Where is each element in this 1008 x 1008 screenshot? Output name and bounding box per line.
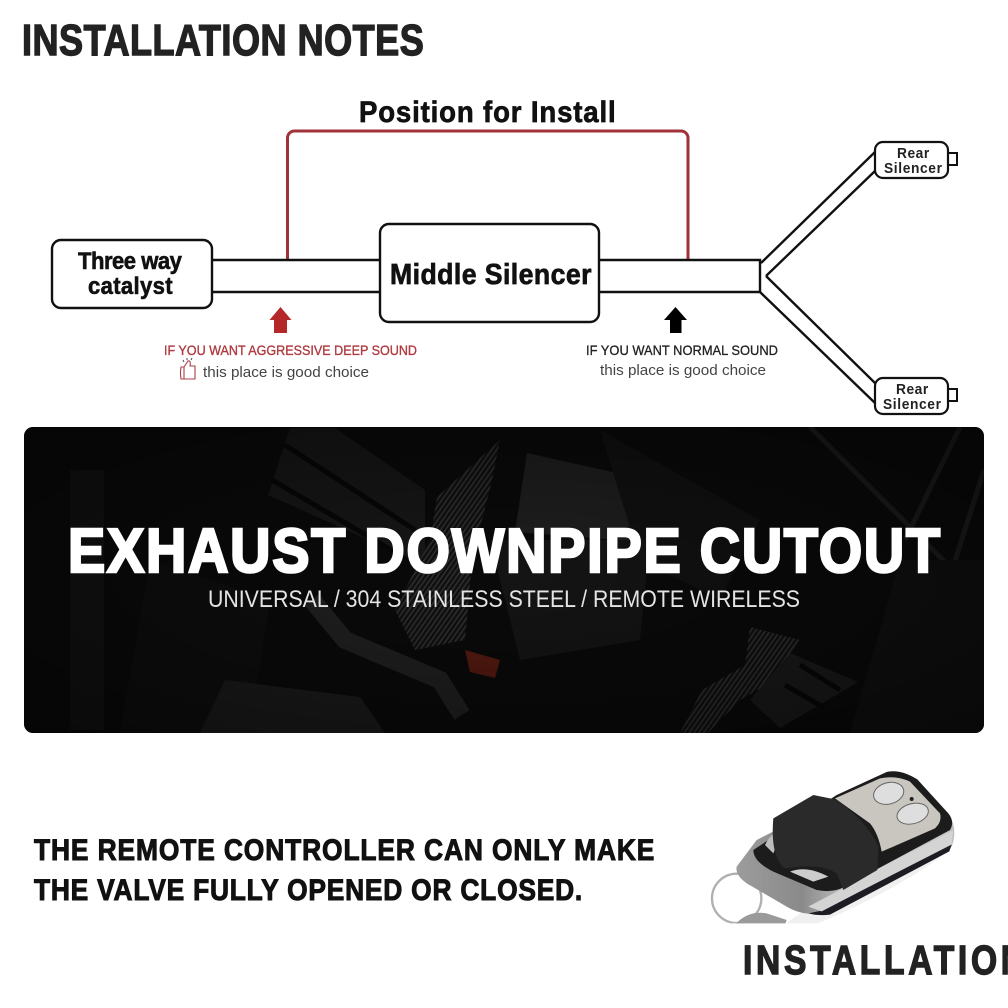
note: good choice, black option: this place is good choice [600, 362, 766, 379]
pipe: catalyst to middle silencer [212, 260, 380, 292]
red bypass line [288, 131, 688, 260]
box: lower rear silencer: Rear [896, 382, 929, 398]
banner subheading: UNIVERSAL / 304 STAINLESS STEEL / REMOTE WIRELESS [208, 586, 800, 613]
box: upper rear silencer: Rear [897, 146, 930, 162]
banner background [24, 427, 984, 733]
text block: remote controller note [34, 832, 654, 906]
arrow: black up [664, 307, 687, 333]
icon: remote control key fob [710, 771, 954, 924]
banner: exhaust downpipe cutout [24, 427, 984, 733]
pipe: lower branch [760, 276, 875, 403]
heading: position for install: Position for Install [359, 96, 616, 129]
banner heading: EXHAUST DOWNPIPE CUTOUT [68, 517, 940, 586]
arrow: red up [270, 307, 292, 333]
box: upper rear silencer [875, 142, 957, 178]
panel: exhaust routing diagram [52, 96, 957, 414]
banner engine bay photo [24, 427, 984, 733]
box: three way catalyst [52, 240, 212, 308]
text block: remote controller note: THE VALVE FULLY OPENED OR CLOSED. [34, 872, 582, 906]
pipe: upper branch [761, 152, 875, 276]
icon: thumbs up [180, 358, 195, 379]
box: lower rear silencer: Silencer [883, 397, 941, 413]
title: installation notes: INSTALLATION NOTES [22, 16, 424, 65]
box: lower rear silencer [875, 378, 957, 414]
note: normal sound: IF YOU WANT NORMAL SOUND [586, 342, 778, 358]
note: good choice, red option: this place is good choice [203, 364, 369, 381]
note: aggressive deep sound: IF YOU WANT AGGRESSIVE DEEP SOUND [164, 342, 417, 358]
box: upper rear silencer: Silencer [884, 161, 942, 177]
box: three way catalyst: Three way [78, 247, 182, 274]
text block: remote controller note: THE REMOTE CONTROLLER CAN ONLY MAKE [34, 832, 654, 866]
box: three way catalyst: catalyst [88, 272, 173, 299]
pipe: middle silencer to split [599, 260, 760, 292]
box: middle silencer [380, 224, 599, 322]
box: middle silencer: Middle Silencer [390, 258, 592, 290]
